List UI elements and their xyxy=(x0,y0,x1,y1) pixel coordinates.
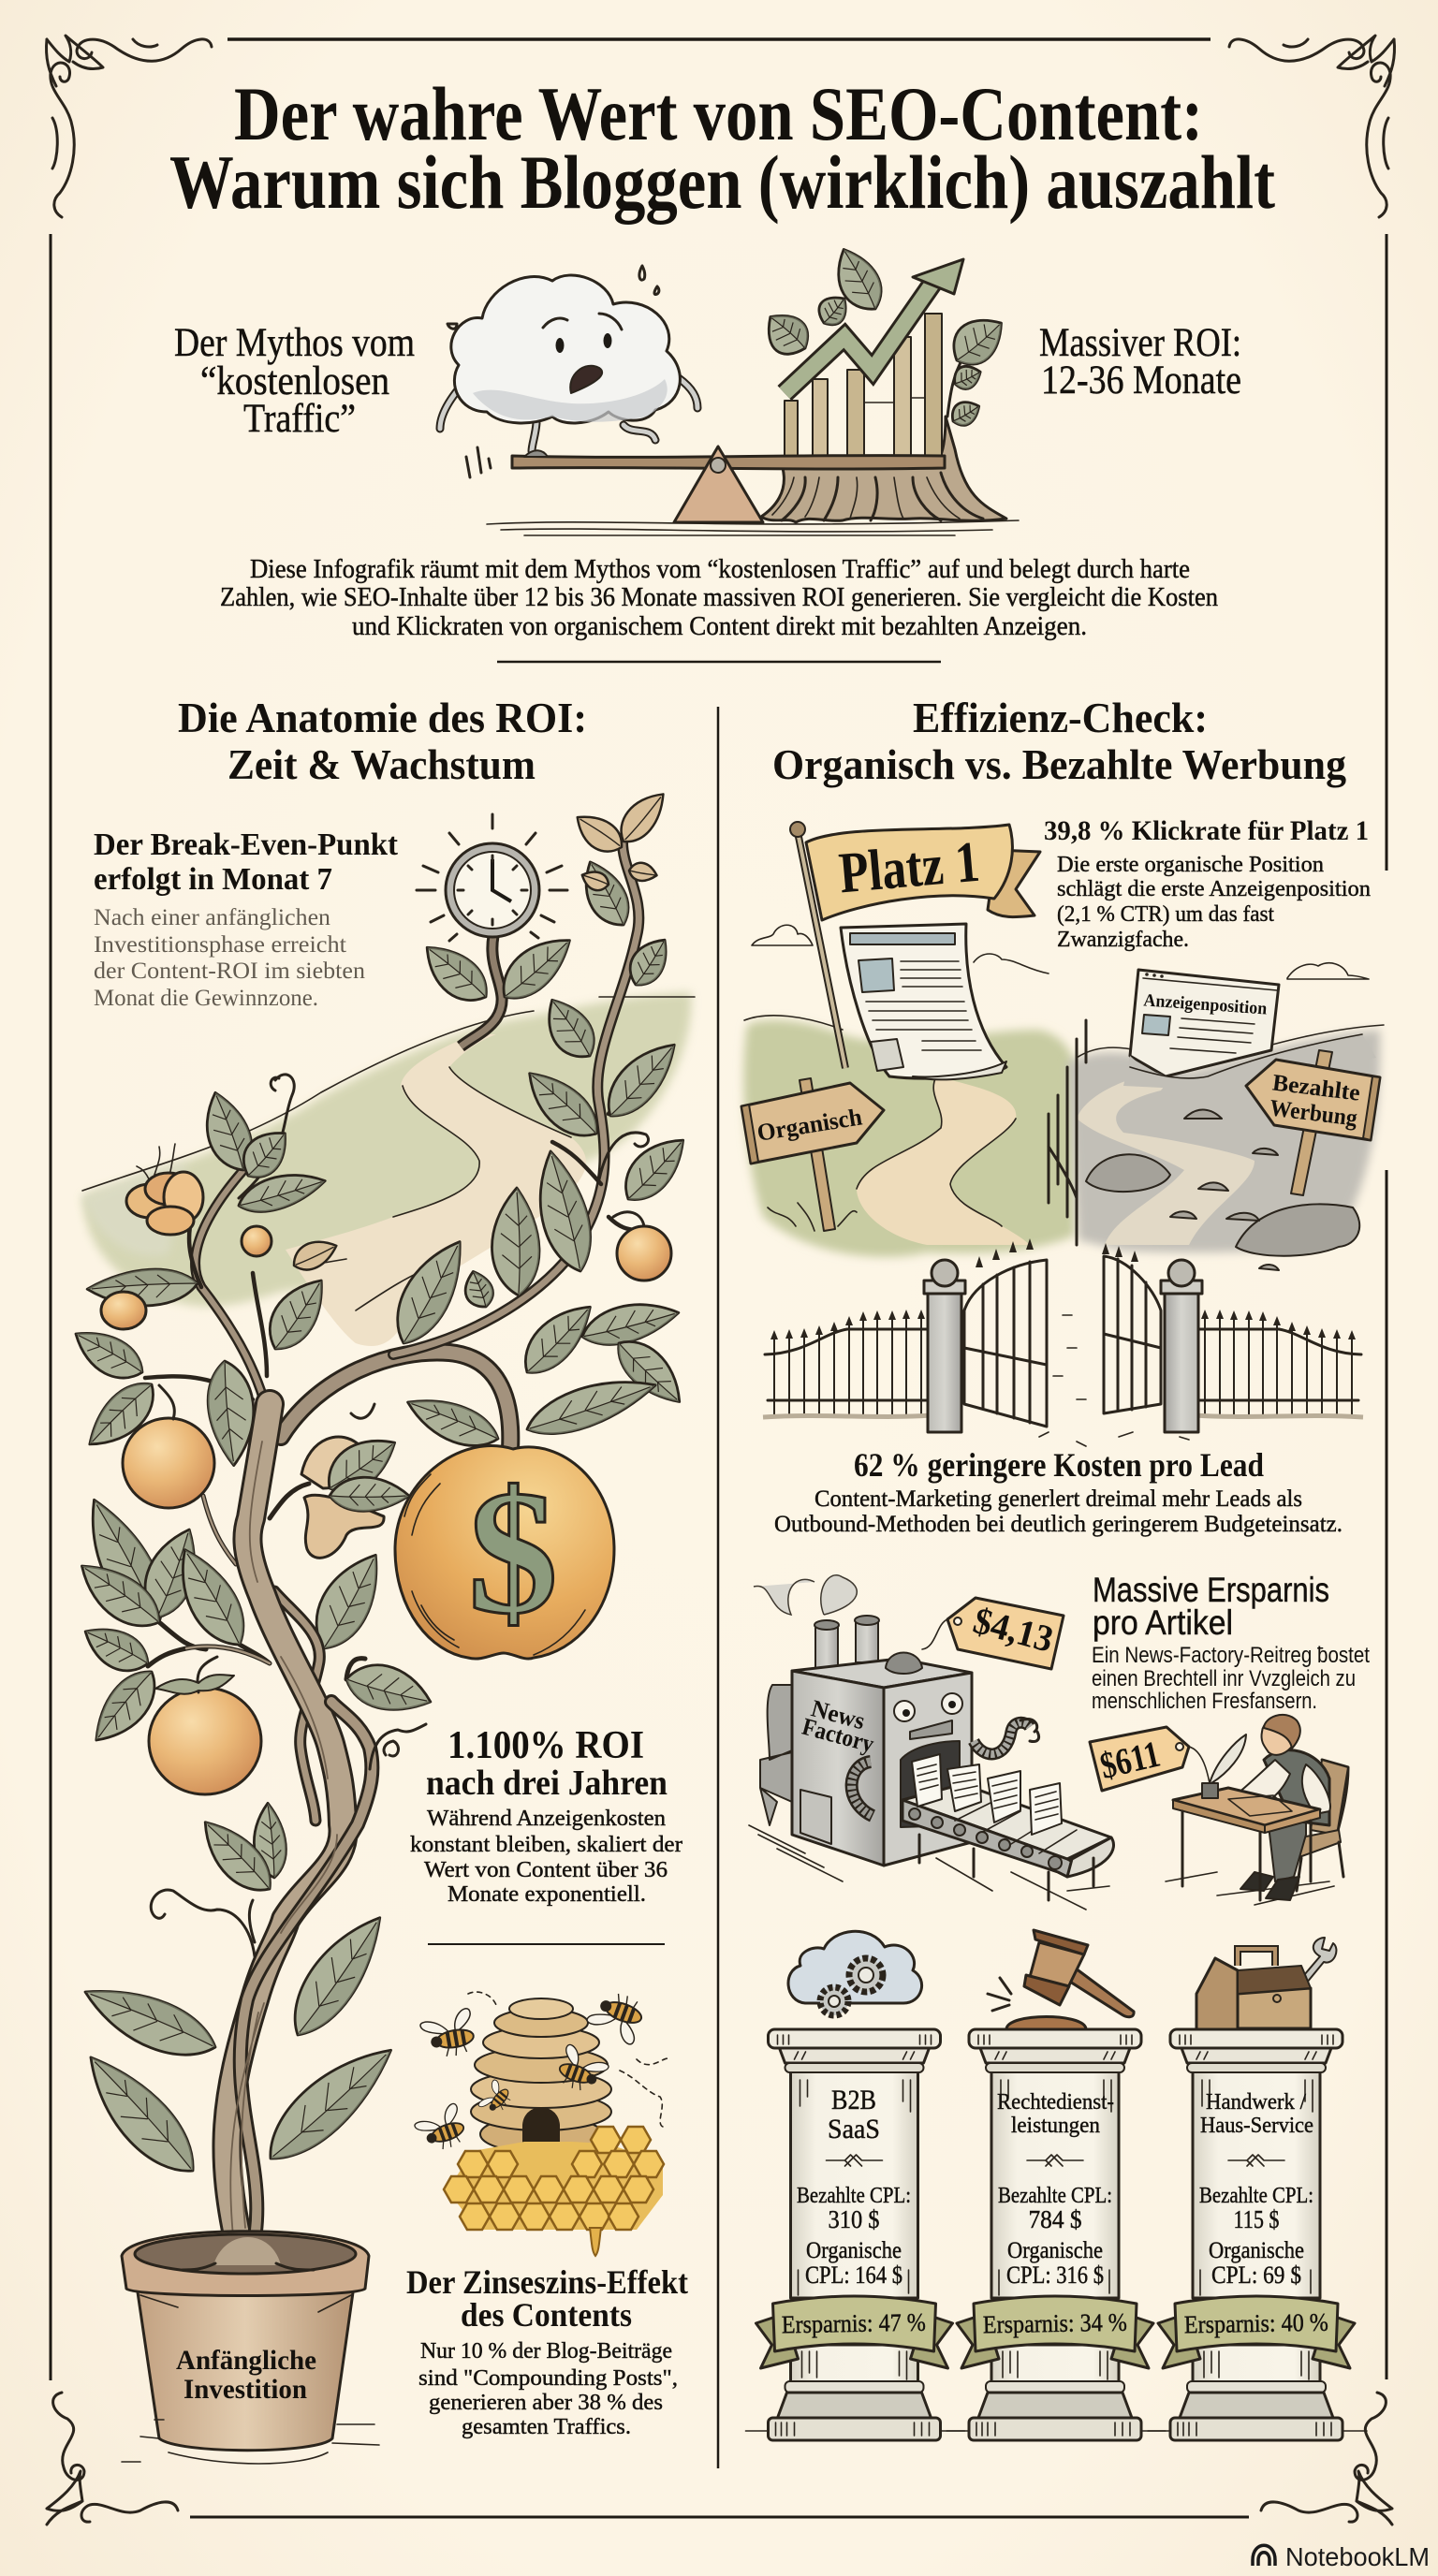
pillar: Rechtedienstleistungen xyxy=(946,1930,1166,2440)
pillar: B2B SaaS: B2B xyxy=(831,2085,876,2115)
vine branches xyxy=(145,842,655,1679)
icon: price tag 611: $611 xyxy=(1096,1733,1164,1787)
pillar: Rechtedienstleistungen: leistungen xyxy=(1011,2114,1100,2138)
paid ground xyxy=(1067,1030,1380,1252)
illustration: organic path vs paid path landscape xyxy=(741,822,1384,1270)
text block: click rate: Zwanzigfache. xyxy=(1057,928,1189,952)
icon: price tag 4,13: $4,13 xyxy=(969,1599,1058,1661)
title: Der wahre Wert von SEO-Content: xyxy=(234,71,1203,156)
illustration: human writer at desk xyxy=(1090,1715,1348,1905)
small fruit and flower xyxy=(617,1226,671,1281)
illustration: open gates and fences xyxy=(763,1238,1363,1446)
text block: lower lead cost: Outbound-Methoden bei deutlich geringerem Budgeteinsatz. xyxy=(774,1512,1343,1537)
text block: savings per article: Ein News-Factory-Reitreg ƀostet xyxy=(1092,1643,1370,1668)
icon: ad window xyxy=(1130,970,1279,1076)
intro text: Zahlen, wie SEO-Inhalte über 12 bis 36 Monate massiven ROI generieren. Sie vergleicht die Kosten xyxy=(220,583,1218,612)
organic road xyxy=(857,1076,1030,1245)
torso xyxy=(1264,1750,1329,1825)
icon: left gate xyxy=(964,1238,1047,1427)
pillar: Rechtedienstleistungen: Bezahlte CPL: xyxy=(998,2184,1112,2208)
lower twigs xyxy=(148,1484,365,1679)
chair xyxy=(1322,1760,1348,1835)
label: myth: Der Mythos vom xyxy=(174,321,415,365)
icon: sign Organisch xyxy=(741,1078,884,1231)
text block: compound effect: sind "Compounding Posts", xyxy=(418,2366,678,2391)
icon: big fruit with dollar sign xyxy=(395,1446,614,1659)
label: massive ROI: 12-36 Monate xyxy=(1041,359,1241,402)
icon: toolbox with wrench xyxy=(1196,1938,1336,2029)
heading: right column: Effizienz-Check: xyxy=(913,694,1208,741)
pillar: B2B SaaS: CPL: 164 $ xyxy=(805,2261,902,2289)
text block: break-even: erfolgt in Monat 7 xyxy=(94,862,332,897)
pillar: Handwerk / Haus-Service: Ersparnis: 40 % xyxy=(1184,2308,1328,2338)
icon: sign Organisch: Organisch xyxy=(756,1103,864,1147)
icon: pot labelled initial investment xyxy=(122,2232,379,2464)
clouds xyxy=(752,925,1369,979)
icon: cloud with gears xyxy=(788,1931,922,2015)
text block: savings per article: pro Artikel xyxy=(1093,1603,1233,1642)
twisted trunk xyxy=(151,1404,426,2265)
icon: price tag 4,13 xyxy=(947,1598,1064,1669)
icon: worried cloud xyxy=(440,266,697,477)
icon: price tag 611 xyxy=(1090,1727,1210,1791)
flower xyxy=(126,1144,203,1235)
label: myth: Traffic” xyxy=(243,397,356,441)
icon: growth arrow xyxy=(785,259,963,393)
rocks xyxy=(1086,1154,1359,1256)
illustration: growing plant with fruit xyxy=(66,784,696,2265)
pillar: Handwerk / Haus-Service: Haus-Service xyxy=(1200,2114,1313,2138)
label: massive ROI xyxy=(1039,321,1241,402)
desk xyxy=(1173,1788,1320,1825)
text block: 1100% ROI: Während Anzeigenkosten xyxy=(427,1807,666,1831)
pillar: B2B SaaS xyxy=(745,1931,964,2440)
wilted flower xyxy=(301,1404,409,1558)
heading: right column: Organisch vs. Bezahlte Werbung xyxy=(772,740,1346,788)
icon: tree stump xyxy=(761,417,1006,522)
text block: break-even: Der Break-Even-Punkt xyxy=(94,827,399,862)
label: myth: “kostenlosen xyxy=(200,359,389,403)
conveyor belt xyxy=(902,1784,1111,1859)
text block: compound effect: des Contents xyxy=(461,2296,632,2334)
icon: sign Bezahlte Werbung xyxy=(1246,1050,1380,1195)
icon: big fruit with dollar sign: $ xyxy=(468,1455,558,1651)
fence broken between xyxy=(1049,1020,1086,1245)
text block: click rate: Die erste organische Position xyxy=(1057,853,1324,877)
articles xyxy=(912,1754,942,1807)
text block: savings per article: Massive Ersparnis xyxy=(1093,1571,1329,1609)
text block: break-even: der Content-ROI im siebten xyxy=(94,959,366,984)
icon: gavel xyxy=(988,1930,1134,2029)
icon: document xyxy=(841,924,1006,1079)
intro text: und Klickraten von organischem Content direkt mit bezahlten Anzeigen. xyxy=(352,612,1087,641)
legs xyxy=(1269,1821,1306,1881)
text block: savings per article: menschlichen Fresfansern. xyxy=(1092,1689,1317,1714)
text block: savings per article: einen Brechtell inr Vvzgleich zu xyxy=(1092,1666,1356,1691)
pillar: Handwerk / Haus-Service: Bezahlte CPL: xyxy=(1199,2184,1313,2208)
icon: flag Platz 1: Platz 1 xyxy=(837,830,982,905)
paid road xyxy=(1077,1067,1255,1245)
pillar: Handwerk / Haus-Service: CPL: 69 $ xyxy=(1211,2261,1301,2289)
text block: 1100% ROI: Wert von Content über 36 xyxy=(424,1858,668,1882)
heading: right column xyxy=(772,694,1346,788)
title xyxy=(169,71,1275,225)
icon: flag Platz 1 xyxy=(790,822,1040,1068)
label: massive ROI: Massiver ROI: xyxy=(1039,321,1241,365)
head xyxy=(1261,1720,1297,1755)
illustration: clock on stem xyxy=(414,814,581,1046)
leaves xyxy=(195,1087,260,1178)
text block: click rate: schlägt die erste Anzeigenposition xyxy=(1057,877,1371,901)
text block: compound effect: gesamten Traffics. xyxy=(462,2415,631,2439)
organic hill xyxy=(743,1020,1075,1257)
text block: 1100% ROI xyxy=(410,1724,682,1907)
text block: lower lead cost xyxy=(774,1446,1343,1537)
text block: click rate: 39,8 % Klickrate für Platz 1 xyxy=(1044,815,1369,846)
icon: pot labelled initial investment: Investition xyxy=(183,2374,307,2405)
heading: left column xyxy=(178,694,587,788)
pillar: Rechtedienstleistungen: Organische xyxy=(1007,2238,1103,2263)
pillar: Rechtedienstleistungen: CPL: 316 $ xyxy=(1006,2261,1104,2289)
illustration: news factory robot xyxy=(749,1575,1114,1910)
pillar: Rechtedienstleistungen: Rechtedienst- xyxy=(997,2090,1114,2115)
icon: bar chart columns xyxy=(785,314,964,457)
text block: compound effect: generieren aber 38 % des xyxy=(429,2391,663,2415)
text block: savings per article xyxy=(1092,1571,1370,1714)
illustration: seesaw with cloud and growth chart xyxy=(440,242,1019,535)
pillar: Handwerk / Haus-Service: Handwerk / xyxy=(1206,2090,1306,2115)
heading: left column: Die Anatomie des ROI: xyxy=(178,694,587,741)
pillar: B2B SaaS: 310 $ xyxy=(828,2205,880,2233)
text block: break-even: Investitionsphase erreicht xyxy=(94,932,346,958)
label: myth xyxy=(174,321,415,441)
icon: right gate xyxy=(1102,1243,1161,1413)
text block: compound effect xyxy=(406,2263,688,2439)
pillar: Handwerk / Haus-Service: 115 $ xyxy=(1234,2205,1279,2233)
pillar: B2B SaaS: Bezahlte CPL: xyxy=(797,2184,911,2208)
icon: pot labelled initial investment: Anfängliche xyxy=(176,2345,316,2376)
text block: click rate: (2,1 % CTR) um das fast xyxy=(1057,902,1274,927)
text block: 1100% ROI: nach drei Jahren xyxy=(426,1764,668,1803)
text block: 1100% ROI: konstant bleiben, skaliert der xyxy=(410,1833,682,1857)
intro text: Diese Infografik räumt mit dem Mythos vom “kostenlosen Traffic” auf und belegt durch harte xyxy=(250,555,1190,584)
text block: 1100% ROI: 1.100% ROI xyxy=(448,1724,644,1767)
icon: seesaw xyxy=(512,446,945,522)
pillar: Rechtedienstleistungen: Ersparnis: 34 % xyxy=(983,2308,1127,2338)
pillar: Handwerk / Haus-Service: Organische xyxy=(1209,2238,1304,2263)
text block: compound effect: Der Zinseszins-Effekt xyxy=(406,2263,688,2301)
icon: sign Bezahlte Werbung: Werbung xyxy=(1269,1095,1359,1132)
illustration: news factory robot: News xyxy=(808,1694,868,1734)
intro text xyxy=(220,555,1218,641)
text block: break-even: Monat die Gewinnzone. xyxy=(94,986,318,1011)
illustration: hill and winding path xyxy=(82,992,695,1346)
icon: beehive and honeycomb xyxy=(412,1985,669,2256)
text block: 1100% ROI: Monate exponentiell. xyxy=(448,1882,646,1907)
pillar: B2B SaaS: Organische xyxy=(806,2238,902,2263)
text block: compound effect: Nur 10 % der Blog-Beiträge xyxy=(420,2339,672,2364)
text block: lower lead cost: 62 % geringere Kosten pro Lead xyxy=(854,1446,1264,1484)
icon: ad window: Anzeigenposition xyxy=(1143,990,1268,1019)
icon: sign Bezahlte Werbung: Bezahlte xyxy=(1271,1070,1361,1106)
text block: click rate xyxy=(1044,815,1371,952)
pillar: Handwerk / Haus-Service xyxy=(1148,1938,1367,2440)
text block: break-even xyxy=(94,827,399,1011)
pillar: B2B SaaS: Ersparnis: 47 % xyxy=(782,2308,926,2338)
pillar: B2B SaaS: SaaS xyxy=(828,2114,880,2144)
heading: left column: Zeit & Wachstum xyxy=(227,740,536,788)
text block: break-even: Nach einer anfänglichen xyxy=(94,905,331,930)
text block: lower lead cost: Content-Marketing generlert dreimal mehr Leads als xyxy=(814,1486,1302,1512)
logo: NotebookLM: NotebookLM xyxy=(1285,2542,1430,2571)
illustration: news factory robot: Factory xyxy=(800,1713,877,1758)
pillar: Rechtedienstleistungen: 784 $ xyxy=(1028,2205,1082,2233)
